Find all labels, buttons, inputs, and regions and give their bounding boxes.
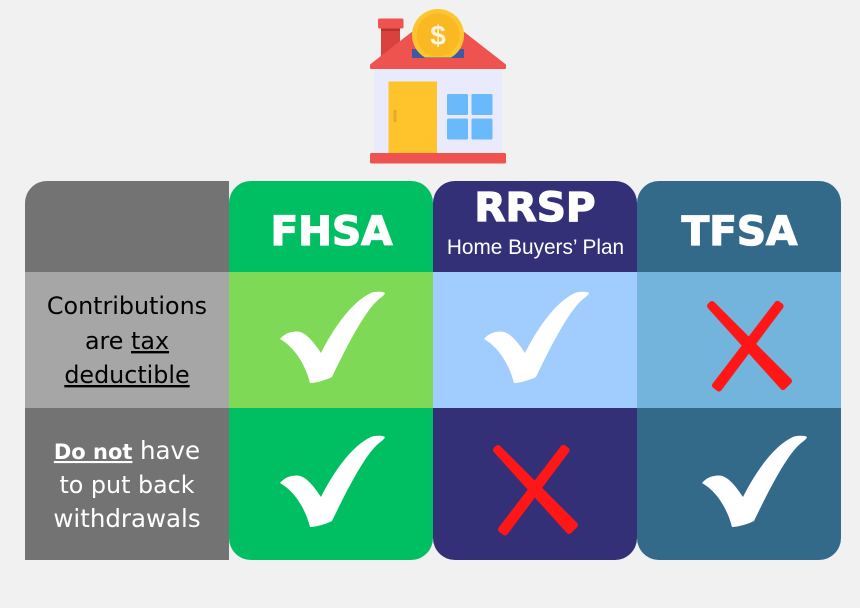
- row label: do not have to put back withdrawals: Do not have: [54, 436, 200, 465]
- icon: check mark: [280, 292, 385, 383]
- icon: check mark: [702, 436, 807, 527]
- cell: FHSA withdrawals: [229, 408, 433, 560]
- row label: contributions are tax deductible: are tax: [85, 327, 169, 355]
- cell: RRSP withdrawals: [433, 408, 637, 560]
- row label: do not have to put back withdrawals: withdrawals: [53, 504, 201, 533]
- cell: RRSP contributions: [433, 272, 637, 408]
- panel: empty header cell: [25, 181, 229, 272]
- cell: TFSA withdrawals: [637, 408, 841, 560]
- icon: red cross: [496, 448, 575, 532]
- icon: check mark: [280, 436, 385, 527]
- icon: dollar coin: [412, 9, 464, 61]
- icon: house with coin: [370, 9, 506, 164]
- icon: check mark: [484, 292, 589, 383]
- row label: contributions are tax deductible: deductible: [64, 361, 190, 389]
- icon: dollar coin: $: [430, 20, 446, 51]
- heading: RRSP: RRSP: [474, 183, 596, 231]
- row label: contributions are tax deductible: [25, 272, 229, 408]
- row label: do not have to put back withdrawals: to put back: [59, 471, 195, 499]
- icon: red cross: [710, 304, 789, 388]
- heading: TFSA: TFSA: [682, 207, 798, 255]
- row label: do not have to put back withdrawals: [25, 408, 229, 560]
- row label: contributions are tax deductible: Contributions: [47, 292, 207, 320]
- cell: TFSA contributions: [637, 272, 841, 408]
- heading: FHSA: FHSA: [270, 207, 393, 255]
- panel: RRSP header: [433, 181, 637, 272]
- subheading: Home Buyers' Plan: Home Buyers’ Plan: [447, 236, 624, 259]
- panel: TFSA header: [637, 181, 841, 272]
- panel: FHSA header: [229, 181, 433, 272]
- cell: FHSA contributions: [229, 272, 433, 408]
